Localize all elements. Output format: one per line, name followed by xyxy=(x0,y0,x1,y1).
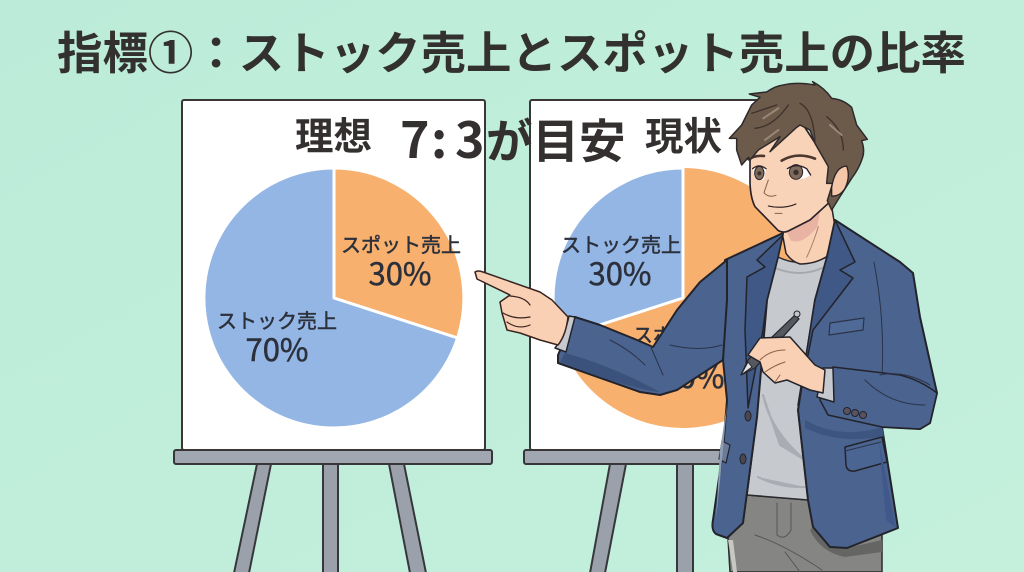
pie labels: current: 70% xyxy=(662,352,724,397)
pie labels: current: スポット売上 xyxy=(633,319,753,348)
ear xyxy=(832,166,848,196)
hand fingers detail xyxy=(503,296,530,327)
pie labels: ideal: スポット売上 xyxy=(341,229,461,258)
pie labels: ideal: 30% xyxy=(369,249,431,294)
pie chart: current 30/70 xyxy=(553,168,813,428)
pie labels: ideal xyxy=(217,229,461,370)
blazer right sleeve xyxy=(820,367,937,429)
T-shirt xyxy=(747,257,827,500)
blazer pointing sleeve xyxy=(558,260,727,395)
board heading: ratio guideline: : xyxy=(431,101,447,173)
hair xyxy=(729,82,867,210)
pie labels: ideal: ストック売上 xyxy=(217,305,337,334)
panel: ideal board xyxy=(182,100,485,450)
shirt cuff: right xyxy=(817,368,834,402)
right hand holding pen xyxy=(748,337,825,393)
board heading: ideal: 理想 xyxy=(295,106,372,162)
pointing hand xyxy=(475,271,568,345)
pie labels: current: ストック売上 xyxy=(561,229,681,258)
eyes xyxy=(753,165,811,180)
blazer body left panel xyxy=(712,233,783,538)
neck xyxy=(782,202,835,264)
nose and mouth xyxy=(764,180,796,213)
head xyxy=(729,82,867,232)
panel: current board xyxy=(530,100,813,450)
board heading: ratio guideline: 7 xyxy=(400,101,430,173)
hair strands xyxy=(752,103,843,150)
trousers xyxy=(728,495,882,572)
pie labels: current: 30% xyxy=(589,249,651,294)
board heading: ratio guideline: 3 xyxy=(455,101,484,173)
shirt cuff: left xyxy=(555,316,575,352)
pie labels: current xyxy=(561,229,753,397)
title: 指標①：ストック売上とスポット売上の比率 xyxy=(57,17,966,82)
pen xyxy=(741,311,800,375)
easel: right board stand xyxy=(524,450,729,572)
easel: left board stand xyxy=(174,450,492,572)
blazer body right panel xyxy=(798,220,937,548)
eyebrows xyxy=(749,156,815,161)
presenter figure xyxy=(475,82,937,572)
face xyxy=(750,120,833,232)
board heading: current: 現状 xyxy=(645,106,722,162)
pie labels: ideal: 70% xyxy=(246,325,308,370)
pie chart: ideal 70/30 xyxy=(204,168,464,428)
board heading: ratio guideline: が目安 xyxy=(486,105,626,172)
